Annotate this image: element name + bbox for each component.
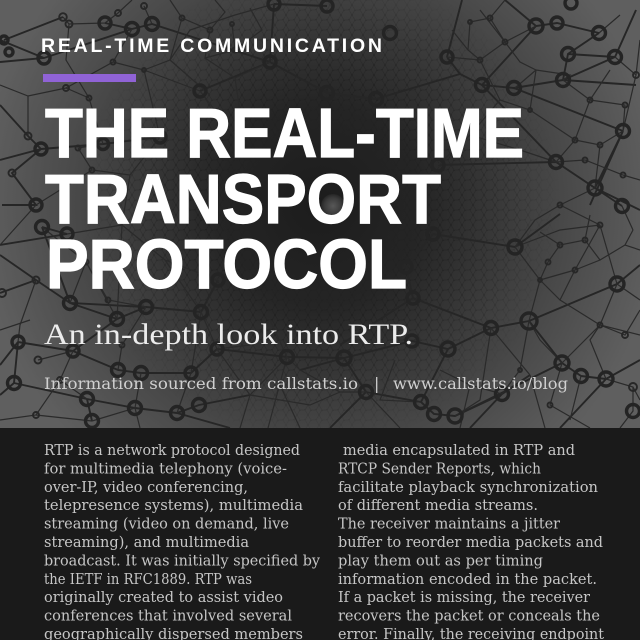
purple accent bar xyxy=(43,74,136,82)
body text: right column: The receiver maintains a jitter xyxy=(338,515,561,533)
body text: right column: of different media streams. xyxy=(338,496,538,514)
body text: left column: the IETF in RFC1889. RTP was xyxy=(44,570,252,588)
body text: right column: buffer to reorder media packets and xyxy=(338,533,603,551)
body text: left column: conferences that involved several xyxy=(44,607,292,625)
body text: left column xyxy=(44,441,320,640)
body text: left column: RTP is a network protocol designed xyxy=(44,441,300,459)
body text: left column: originally created to assist video xyxy=(44,588,283,606)
body text: right column: RTCP Sender Reports, which xyxy=(338,459,541,477)
body text: left column: over-IP, video conferencing, xyxy=(44,478,248,496)
source line: Information sourced from callstats.io xyxy=(44,374,358,393)
title: TRANSPORT xyxy=(45,160,441,238)
eyebrow heading: REAL-TIME COMMUNICATION xyxy=(41,35,382,57)
body text: right column: information encoded in the packet. xyxy=(338,570,597,588)
body text: left column: streaming (video on demand, live xyxy=(44,515,289,533)
subtitle: An in-depth look into RTP. xyxy=(44,318,413,351)
body text: left column: for multimedia telephony (voice- xyxy=(44,459,287,477)
network hub rings xyxy=(0,0,640,428)
small network nodes xyxy=(0,3,639,418)
body text: left column: streaming), and multimedia xyxy=(44,533,249,551)
body text: right column: play them out as per timing xyxy=(338,551,543,569)
title: THE REAL-TIME xyxy=(45,94,524,172)
title xyxy=(45,94,524,303)
thick network links xyxy=(0,0,640,428)
source line xyxy=(44,374,568,393)
body text: left column: telepresence systems), multimedia xyxy=(44,496,303,514)
thin network mesh xyxy=(0,0,640,428)
source line: | xyxy=(374,374,379,393)
background: network photograph xyxy=(0,0,640,428)
body text: right column: media encapsulated in RTP and xyxy=(343,441,575,459)
title: PROTOCOL xyxy=(46,225,407,303)
dark text panel xyxy=(0,428,640,640)
body text: right column: recovers the packet or conceals the xyxy=(338,607,600,625)
body text: right column xyxy=(338,441,604,640)
body text: right column: If a packet is missing, the receiver xyxy=(338,588,591,606)
body text: right column: facilitate playback synchronization xyxy=(338,478,598,496)
body text: left column: broadcast. It was initially specified by xyxy=(44,551,320,569)
source line: www.callstats.io/blog xyxy=(393,374,568,393)
